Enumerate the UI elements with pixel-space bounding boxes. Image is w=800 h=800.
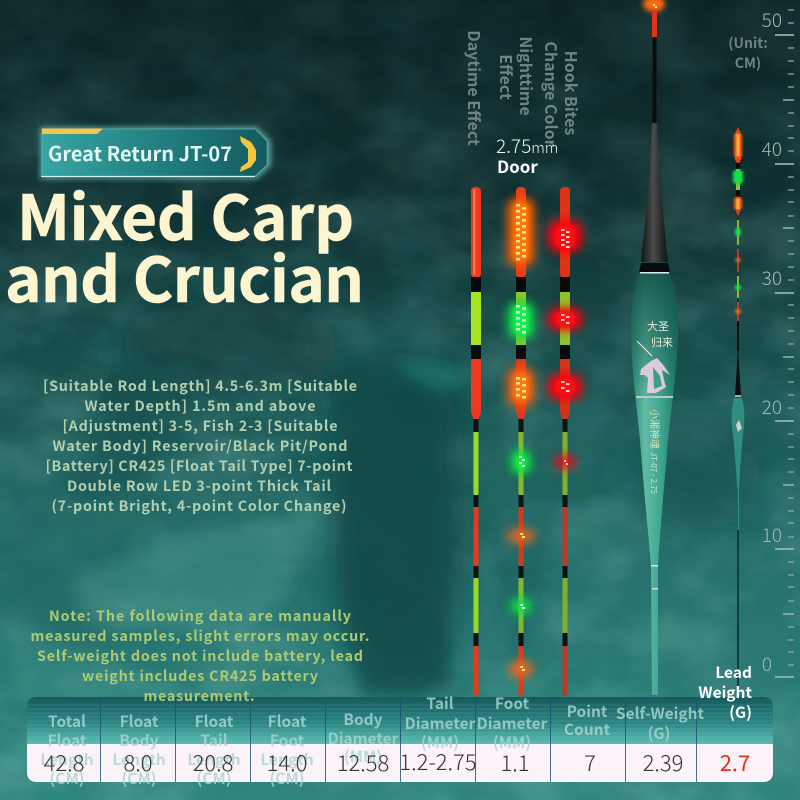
note text [30,605,370,706]
column: float body length: Length [112,748,166,770]
specification text [43,375,357,516]
column: total float length: Length [40,748,94,770]
green body [631,272,678,695]
large float [631,0,678,695]
specification table [27,661,773,789]
column: float tail length: Tail [200,729,228,751]
banner accent strip [42,128,103,134]
column: tail diameter: Tail [426,692,454,714]
column label: hook bites change color: Change Color [540,41,564,147]
ruler scale: 10 [762,521,782,548]
column: point count: 7 [584,746,596,778]
column: total float length: 42.8 [44,746,84,778]
column: float foot length: Float [268,710,307,732]
small float LEDs [733,133,743,314]
note text: Note: The following data are manually [49,605,352,626]
large float: 归来 [651,334,673,350]
body artwork: warrior figure [637,341,670,393]
title [5,168,364,320]
column: lead weight: 2.7 [720,746,750,778]
column: point count: Count [564,718,611,740]
ruler unit: (Unit: [728,33,768,53]
column: float body length: (CM) [121,767,157,789]
column: foot diameter [477,692,548,778]
column: lead weight: Weight [698,681,752,703]
note text: weight includes CR425 battery [82,665,319,686]
body model text: 小湘神魂 [648,409,663,449]
specification text: [Suitable Rod Length] 4.5-6.3m [Suitable [43,375,357,396]
column: total float length [40,710,94,789]
specification text: [Battery] CR425 [Float Tail Type] 7-point [46,455,352,476]
note text: measured samples, slight errors may occur. [30,625,370,646]
label: tail diameter door [496,132,558,178]
column: float tail length: 20.8 [193,746,233,778]
column: float body length: Float [120,710,159,732]
column: total float length: (CM) [49,767,85,789]
ruler scale: 40 [762,135,782,162]
specification text: Water Depth] 1.5m and above [84,395,316,416]
ruler scale: 30 [762,264,782,291]
column: lead weight: Lead [715,661,752,683]
ruler scale: CM) [735,53,761,73]
column: tail diameter: Diameter [405,712,476,734]
column: total float length: Total [48,710,86,732]
large float: JT-07 - 2.75 [648,452,659,494]
ruler minor ticks [788,10,794,665]
column: point count [564,700,611,778]
column: point count: Point [567,700,608,722]
ruler scale: 0 [762,650,772,677]
column label: nighttime effect [495,36,539,116]
column: float body length [112,710,166,789]
column: body diameter: Diameter [328,727,399,749]
column: total float length: Float [48,729,87,751]
column label: nighttime effect: Nighttime [515,36,539,116]
column: float tail length: Float [195,710,234,732]
column: lead weight: (G) [729,701,752,723]
column: tail diameter [399,692,477,777]
column: self-weight [616,702,705,778]
specification text: Water Body] Reservoir/Black Pit/Pond [52,435,348,456]
table values row [27,744,773,782]
ruler scale [728,6,794,677]
column: self-weight: 2.39 [643,746,683,778]
column: float body length: Body [119,729,159,751]
black cone [641,123,668,262]
body calligraphy: 大圣 [647,318,669,334]
note text: Self-weight does not include battery, lead [37,645,363,666]
banner label: Great Return JT-07 [48,138,232,167]
column: tail diameter: 1.2-2.75 [399,745,477,777]
LED points [516,204,526,671]
column: float tail length: Length [187,748,241,770]
table header band [27,697,773,744]
column: foot diameter: (MM) [493,731,531,753]
label: tail diameter door: 2.75mm [496,132,558,159]
column: tail diameter: (MM) [421,731,459,753]
column: float foot length: 14.0 [267,746,307,778]
LED glows [548,220,582,468]
label: tail diameter door: Door [497,153,538,178]
column label: hook bites change color: Hook Bites [560,51,584,135]
column: self-weight: (G) [648,722,670,744]
specification text: Double Row LED 3-point Thick Tail [67,475,331,496]
icon: chevron [240,136,256,172]
tip LED glow [643,0,665,12]
column: foot diameter: Diameter [477,712,548,734]
column: foot diameter: Foot [495,692,530,714]
column label: nighttime effect: Effect [495,54,519,100]
float tail: daytime effect [471,187,481,696]
column: float foot length: Foot [270,729,305,751]
float tail: nighttime effect [508,187,534,696]
ruler numbers: 50 [762,6,782,33]
note text: measurement. [144,685,254,706]
column label: hook bites change color [540,41,584,147]
specification text: (7-point Bright, 4-point Color Change) [52,495,346,516]
column: lead weight [698,661,752,778]
ruler scale: 20 [762,393,782,420]
small float cone and body [735,350,741,395]
column: float foot length: Length [260,748,314,770]
specification text: [Adjustment] 3-5, Fish 2-3 [Suitable [62,415,338,436]
LED points [561,229,570,465]
column: body diameter: (MM) [344,745,382,767]
column: float tail length [187,710,241,789]
column: float foot length: (CM) [269,767,305,789]
float tail: hook bites change color [548,187,582,696]
column: float tail length: (CM) [196,767,232,789]
small float [732,127,744,696]
column: body diameter: Body [343,708,383,730]
column: float foot length [260,710,314,789]
column: body diameter [328,708,399,778]
LED glows [508,198,534,677]
column label: daytime effect: Daytime Effect [463,30,487,146]
title: and Crucian [5,230,364,320]
banner: model name [40,127,271,179]
title: Mixed Carp [17,168,354,258]
ruler major ticks [775,35,794,677]
column: foot diameter: 1.1 [500,746,530,778]
column: self-weight: Self-Weight [616,702,705,724]
column: float body length: 8.0 [123,746,153,778]
column: body diameter: 12.58 [337,746,389,778]
